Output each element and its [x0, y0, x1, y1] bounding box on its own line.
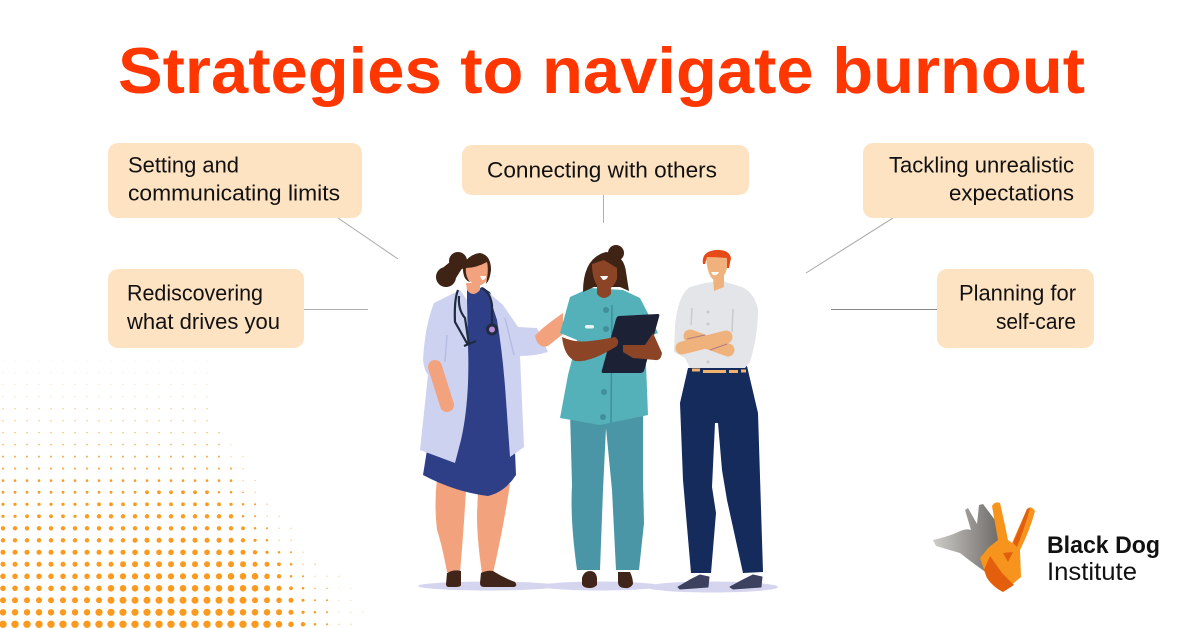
callout: connecting with others	[462, 145, 749, 195]
callout: planning for self-care: self-care	[996, 309, 1076, 334]
callout: setting and communicating limits	[108, 143, 362, 218]
figure: nurse	[560, 245, 662, 588]
halftone dot pattern	[3, 361, 363, 624]
callout: setting and communicating limits: communicating limits	[128, 181, 340, 206]
title: Strategies to navigate burnout	[118, 34, 1085, 107]
logo wordmark	[1047, 532, 1160, 586]
callout: rediscovering what drives you: what drives you	[126, 309, 280, 334]
connector: tackling expectations	[806, 218, 893, 273]
callout: setting and communicating limits: Setting and	[128, 153, 239, 178]
logo wordmark: Black Dog	[1047, 532, 1160, 559]
ground shadow	[418, 582, 778, 592]
callout: rediscovering what drives you	[108, 269, 304, 348]
connector: connecting	[602, 195, 604, 223]
logo wordmark: Institute	[1047, 558, 1137, 586]
illustration: three health workers	[418, 245, 778, 592]
callout: tackling unrealistic expectations: expectations	[949, 181, 1074, 206]
callout: planning for self-care	[937, 269, 1094, 348]
figure: man	[674, 250, 763, 589]
connector: setting limits	[338, 218, 398, 259]
callout: rediscovering what drives you: Rediscovering	[127, 281, 263, 306]
callout: planning for self-care: Planning for	[959, 281, 1076, 306]
connector: planning self-care	[831, 308, 937, 310]
logo: Black Dog Institute	[933, 502, 1160, 592]
callout: tackling unrealistic expectations: Tackling unrealistic	[889, 153, 1074, 178]
callout: tackling unrealistic expectations	[863, 143, 1094, 218]
callout: connecting with others: Connecting with others	[487, 158, 717, 183]
connector: rediscovering	[304, 308, 368, 310]
figure: doctor	[420, 252, 563, 587]
logo icon: dog shadow and hand	[933, 502, 1035, 592]
